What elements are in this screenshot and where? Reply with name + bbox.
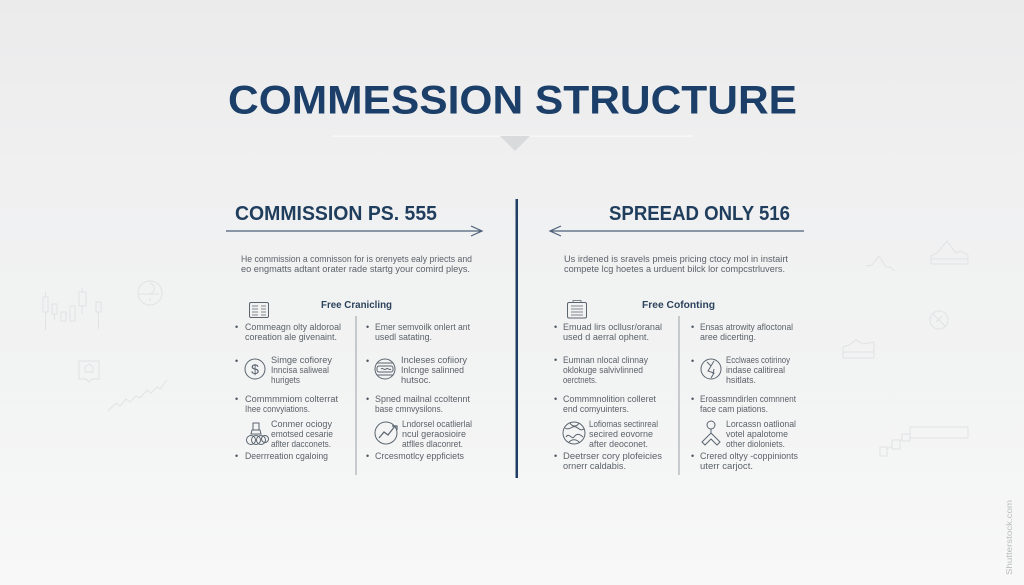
background icon: circle badge: [930, 311, 948, 329]
list: spread left column: end comyuinters.: [563, 404, 629, 414]
list: spread right column: face cam piations.: [700, 404, 768, 414]
list: spread left column: •: [554, 451, 557, 461]
list: commission right column: Inlcnge salinned: [401, 365, 464, 375]
list: commission right column: atflles dlaconret.: [402, 439, 463, 449]
column divider: [678, 316, 680, 475]
list: commission left column: Simge cofiorey: [271, 355, 333, 365]
list: spread right column: aree dicerting.: [700, 332, 756, 342]
background icon: small peak chart: [866, 256, 895, 271]
list: spread right column: Crered oltyy -coppinionts: [700, 451, 799, 461]
list: spread left column: secired eovorne: [589, 429, 653, 439]
list: commission left column: Deerrreation cgaloing: [245, 451, 328, 461]
list: spread right column: •: [691, 394, 694, 404]
list: spread left column: •: [554, 394, 557, 404]
central divider: [516, 199, 518, 478]
list: commission left column: •: [235, 322, 238, 332]
list: commission right column: Incleses cofiiory: [401, 355, 468, 365]
panel: commission: [226, 203, 482, 475]
watermark: Shutterstock.com: [1005, 500, 1014, 575]
list: spread right column: •: [691, 322, 694, 332]
list: commission left column: Commmmiom colterrat: [245, 394, 339, 404]
list: commission right column: hutsoc.: [401, 375, 431, 385]
icon: clipboard: [568, 300, 586, 318]
list: spread left column: oerctnets.: [563, 375, 597, 385]
list: spread left column: used d aerral ophent.: [563, 332, 649, 342]
list: commission left column: Inncisa saliweal: [271, 365, 329, 375]
list: spread left column: after deoconet.: [589, 439, 648, 449]
icon: trend circle: [375, 422, 397, 444]
title: COMMESSION STRUCTURE: [228, 78, 797, 122]
background icon: steps and bar: [880, 427, 968, 456]
list: spread left column: •: [554, 322, 557, 332]
list: spread left column: Lofiomas sectinreal: [589, 419, 658, 429]
intro text: commission: He commission a comnisson for is orenyets ealy priects and: [241, 254, 472, 264]
list: commission left column: Ihee convyiations.: [245, 404, 310, 414]
list: commission right column: Crcesmotlcy eppficiets: [375, 451, 465, 461]
list: spread left column: Deetrser cory plofeicies: [563, 451, 663, 461]
intro text: spread: [564, 254, 789, 274]
list: commission right column: usedl satating.: [375, 332, 432, 342]
icon: newspaper: [250, 302, 268, 318]
list: spread left column: •: [554, 355, 557, 365]
arrow: right: [226, 226, 482, 236]
list: spread right column: indase calitireal: [726, 365, 785, 375]
icon: dollar: $: [251, 361, 259, 377]
list: spread left column: Commmnolition colleret: [563, 394, 657, 404]
list: commission left column: Commeagn olty aldoroal: [245, 322, 341, 332]
intro text: commission: [241, 254, 472, 274]
column divider: [356, 316, 357, 475]
list: spread right column: Ecclwaes cotirinoy: [726, 355, 791, 365]
heading: spread: SPREEAD ONLY 516: [609, 203, 790, 225]
list: spread left column: oklokuge salvivlinned: [563, 365, 643, 375]
list: commission left column: •: [235, 394, 238, 404]
icon: people: [246, 423, 268, 444]
icon: globe badge: [563, 422, 585, 444]
list: commission right column: Lndorsel ocatlierlal: [402, 419, 472, 429]
background icon: chat bubble: [79, 361, 99, 382]
intro text: commission: eo engmatts adtant orater rade startg your comird pleys.: [241, 264, 470, 274]
background icon: area chart: [843, 340, 874, 358]
list: spread right column: other dioloniets.: [726, 439, 785, 449]
list: spread left column: Emuad lirs ocllusr/oranal: [563, 322, 662, 332]
arrow: left: [550, 226, 804, 236]
list: commission left column: aflter dacconets.: [271, 439, 331, 449]
list: spread right column: hsitlats.: [726, 375, 756, 385]
list: commission left column: [235, 322, 341, 461]
list: spread right column: •: [691, 451, 694, 461]
intro text: spread: Us irdened is sravels pmeis pricing ctocy mol in instairt: [564, 254, 789, 264]
intro text: spread: compete lcg hoetes a urduent bilck lor compcstrluvers.: [564, 264, 785, 274]
list: spread right column: Ensas atrowity afloctonal: [700, 322, 793, 332]
list: spread right column: Lorcassn oatlional: [726, 419, 796, 429]
background icon: trend line: [108, 380, 167, 411]
heading: commission: COMMISSION PS. 555: [235, 203, 437, 225]
background icon: mountain chart: [931, 241, 968, 264]
list: spread left column: [554, 322, 663, 471]
background icon: candlestick chart: [43, 288, 101, 330]
list: spread left column: Eumnan nlocal clinnay: [563, 355, 649, 365]
list: commission left column: Conmer ociogy: [271, 419, 333, 429]
list: commission left column: •: [235, 356, 238, 366]
list: commission left column: •: [235, 451, 238, 461]
subheading: spread: Free Cofonting: [642, 300, 715, 311]
list: spread left column: ornerr caldabis.: [563, 461, 626, 471]
list: commission right column: •: [366, 356, 369, 366]
title divider with pointer: [333, 136, 693, 151]
list: commission left column: emotsed cesarie: [271, 429, 333, 439]
list: spread right column: [691, 322, 799, 471]
subheading: commission: Free Cranicling: [321, 300, 392, 311]
list: spread right column: uterr carjoct.: [700, 461, 753, 471]
list: commission right column: Spned mailnal ccoltennt: [375, 394, 471, 404]
icon: person with arms: [702, 421, 720, 445]
list: spread right column: votel apalotome: [726, 429, 788, 439]
list: commission right column: ncul geraosioire: [402, 429, 466, 439]
list: spread right column: Eroassmndirlen comnnent: [700, 394, 797, 404]
list: commission left column: coreation ale givenaint.: [245, 332, 337, 342]
list: commission right column: •: [366, 322, 369, 332]
icon: figure badge: [701, 359, 721, 379]
list: commission right column: base cmnvysilons.: [375, 404, 443, 414]
list: commission right column: •: [366, 394, 369, 404]
list: commission left column: hurigets: [271, 375, 301, 385]
list: commission right column: •: [366, 451, 369, 461]
list: spread right column: •: [691, 356, 694, 366]
list: commission right column: Emer semvoilk onlert ant: [375, 322, 471, 332]
icon: cash badge: [375, 359, 395, 379]
list: commission right column: [366, 322, 472, 461]
panel: spread: [550, 203, 804, 475]
background icon: clock: [138, 281, 162, 305]
